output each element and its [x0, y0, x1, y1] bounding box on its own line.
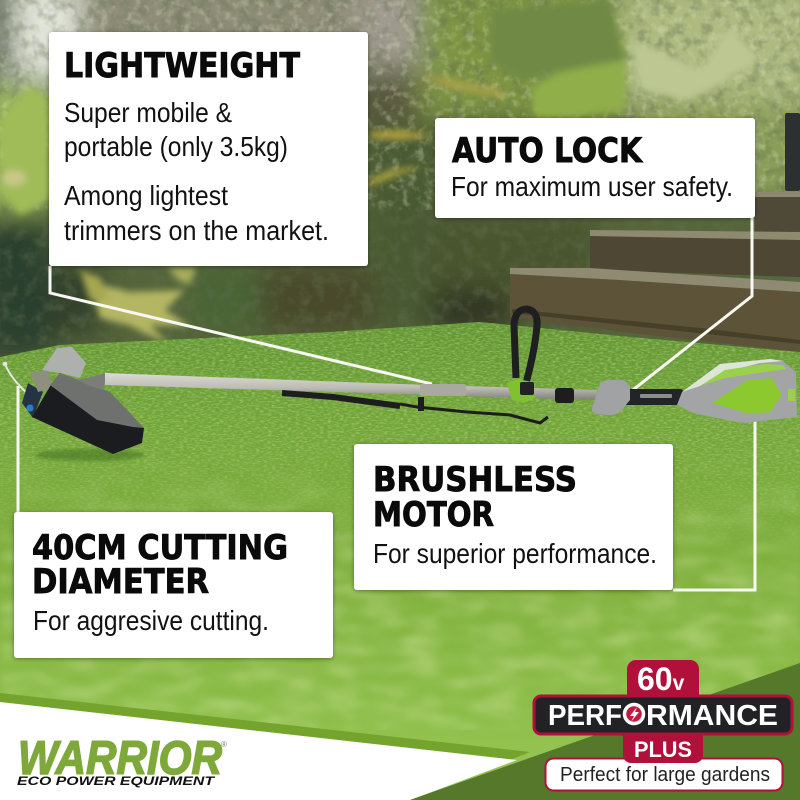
trimmer: loop handle: [514, 309, 537, 383]
callout: cutting diameter: [14, 512, 333, 658]
trimmer: shaft: [105, 373, 597, 400]
heading: motor: MOTOR: [373, 495, 494, 535]
badge bar: performance: [534, 696, 792, 734]
badge tab: 60v: 60v: [637, 661, 685, 697]
heading: auto lock: AUTO LOCK: [452, 131, 643, 171]
badge tab: 60v: [627, 660, 699, 700]
badge tab: plus: [623, 735, 703, 763]
stone steps: [510, 192, 800, 352]
heading: lightweight: LIGHTWEIGHT: [64, 46, 301, 86]
callout: auto lock: [435, 118, 755, 218]
foliage highlights: [0, 0, 760, 345]
text: mobility description: Super mobile &: [64, 97, 232, 128]
badge bar: performance: RMANCE: [646, 700, 778, 732]
dark object: [785, 113, 800, 191]
badge pill: tagline: [546, 758, 782, 790]
logo tagline: ECO POWER EQUIPMENT: [17, 776, 215, 788]
footer band: lime stripe: [0, 693, 530, 800]
trimmer: lime collar and clamp: [420, 379, 574, 403]
text: weight: portable (only 3.5kg): [64, 131, 288, 162]
text: safety: For maximum user safety.: [451, 171, 733, 202]
badge pill: tagline: Perfect for large gardens: [560, 764, 770, 786]
heading: brushless: BRUSHLESS: [373, 460, 577, 500]
callout: lightweight: [49, 32, 368, 266]
leader lines: [18, 218, 755, 590]
trimmer: strap: [282, 393, 548, 423]
text: market position: trimmers on the market.: [64, 215, 329, 246]
trimmer: cutting head: [3, 347, 145, 461]
footer band: olive corner: [410, 663, 800, 800]
text: aggressive cutting: For aggresive cutting.: [33, 605, 269, 636]
text: among lightest: Among lightest: [64, 180, 228, 211]
trimmer: rear handle and motor body: [592, 359, 797, 423]
callout: brushless motor: [354, 444, 673, 590]
logo: warrior: ®: [221, 740, 227, 749]
text: performance: For superior performance.: [373, 538, 657, 569]
badge bar: performance: PERF: [548, 700, 622, 732]
badge tab: plus: PLUS: [634, 737, 692, 762]
lawn: [0, 322, 800, 800]
badge: 60v performance plus: [534, 660, 792, 790]
footer band: white wedge: [0, 702, 517, 800]
logo: warrior: WARRIOR: [18, 731, 222, 784]
heading: 40cm cutting: 40CM CUTTING: [32, 528, 288, 568]
heading: diameter: DIAMETER: [32, 562, 209, 602]
